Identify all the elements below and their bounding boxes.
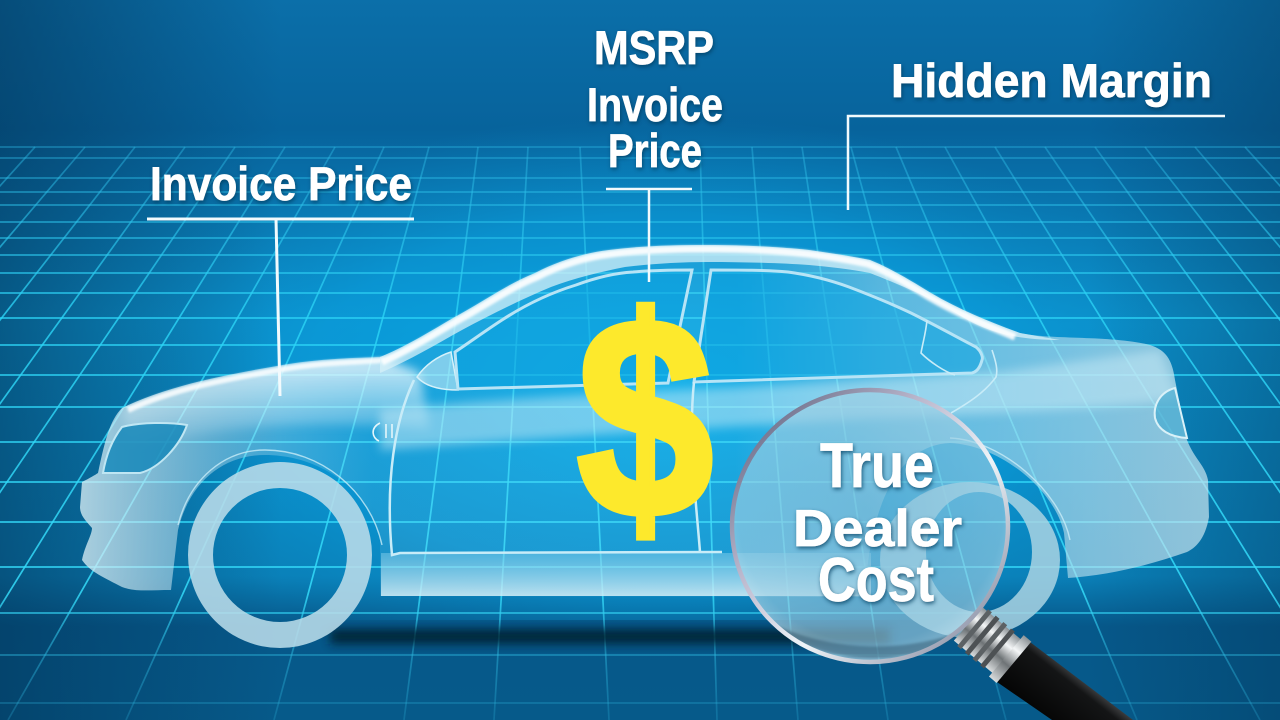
label: hidden margin — [848, 54, 1225, 210]
handle grip — [997, 642, 1133, 720]
roof band — [380, 245, 1060, 373]
label: hidden margin: Hidden Margin — [891, 54, 1212, 107]
invoice leader line — [147, 219, 414, 396]
headlight — [103, 423, 187, 473]
lens text: True — [820, 431, 934, 501]
mirror — [417, 352, 458, 390]
label: invoice price — [147, 157, 414, 396]
door lines — [390, 380, 722, 555]
front wheel — [188, 462, 372, 648]
chrome collar — [951, 603, 1031, 683]
sill band — [381, 553, 871, 596]
label: invoice price: Invoice Price — [150, 157, 412, 210]
quarter line — [921, 320, 997, 413]
lens text — [793, 431, 962, 615]
front window — [455, 270, 692, 389]
label: MSRP invoice price — [587, 21, 723, 282]
car body — [80, 245, 1209, 597]
lens text: Cost — [818, 546, 934, 615]
hood highlight — [121, 354, 432, 438]
door handle — [373, 423, 392, 441]
magnifying glass — [732, 390, 1133, 720]
hidden margin leader line — [848, 116, 1225, 210]
roof highlight — [382, 249, 1015, 362]
rear window — [694, 270, 982, 382]
label: MSRP invoice price: Invoice — [587, 78, 723, 131]
dollar sign: $ — [577, 260, 713, 577]
rear wheel — [880, 482, 1060, 638]
lens rim — [732, 390, 1008, 662]
label: MSRP invoice price: Price — [608, 124, 702, 177]
body silhouette — [80, 245, 1209, 597]
MSRP leader line — [606, 189, 692, 282]
lens shadow band — [775, 625, 965, 658]
lens — [732, 390, 1008, 662]
wheel arch line — [178, 438, 1070, 545]
belt band — [380, 350, 1180, 450]
label: MSRP invoice price: MSRP — [594, 21, 714, 74]
tail light — [1155, 388, 1187, 438]
lens text: Dealer — [793, 500, 962, 558]
hood top edge — [128, 360, 384, 410]
perspective grid — [0, 147, 1280, 720]
car shadow — [330, 629, 890, 644]
